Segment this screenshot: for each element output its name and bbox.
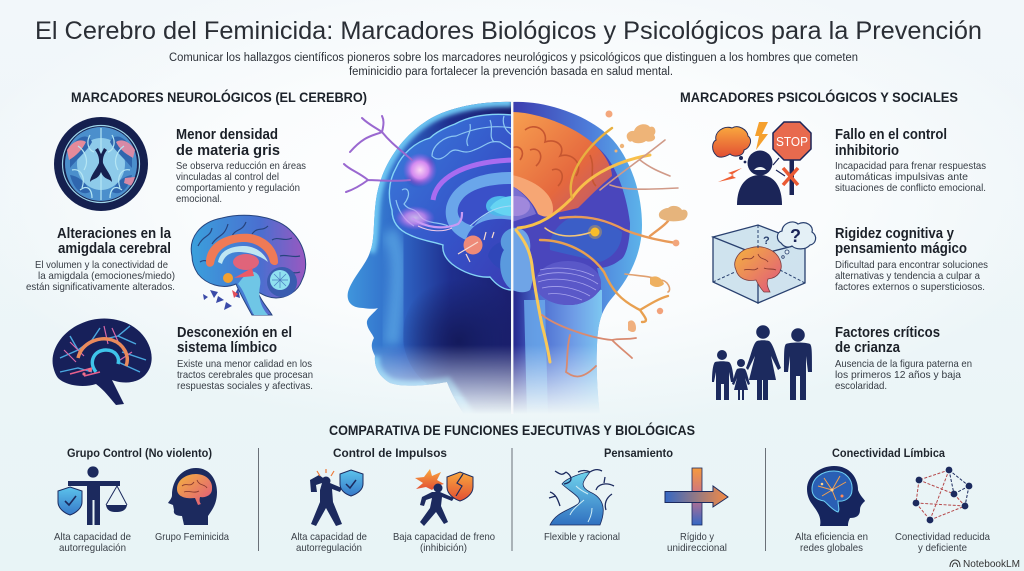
label: autorregulación	[59, 542, 126, 554]
label: Alta capacidad de	[291, 531, 367, 543]
icon: brain in a glass box: ?	[790, 226, 801, 246]
label	[393, 531, 495, 554]
left neurons: purple branches	[344, 116, 412, 192]
text: factores de crianza: Factores críticos	[835, 325, 940, 341]
label: Baja capacidad de freno	[393, 531, 495, 543]
text: amigdala: la amigdala (emociones/miedo)	[38, 270, 175, 282]
label: Alta capacidad de	[54, 531, 131, 543]
text: desconexion: Existe una menor calidad en los	[177, 358, 312, 370]
central illustration: split head	[344, 100, 688, 420]
panel: psychological and social markers	[680, 90, 988, 400]
text: desconexion: sistema límbico	[177, 340, 277, 356]
text: menor densidad: comportamiento y regulación	[176, 182, 300, 194]
title: El Cerebro del Feminicida: Marcadores Biológicos y Psicológicos para la Prevención	[35, 17, 982, 45]
label: Grupo Feminicida	[155, 531, 229, 543]
text: menor densidad: Se observa reducción en áreas	[176, 160, 306, 172]
amber neural tracts	[516, 128, 678, 376]
label	[54, 531, 131, 554]
icon: head with brain	[168, 468, 217, 525]
icon: rigid crossing arrow	[665, 468, 728, 525]
clouds and nodes	[588, 110, 688, 332]
text: amigdala: están significativamente alterados.	[26, 281, 175, 293]
label: Rígido y	[680, 531, 715, 543]
text: menor densidad: emocional.	[176, 193, 222, 205]
column heading: Pensamiento	[604, 446, 673, 460]
label: redes globales	[800, 542, 863, 554]
icon: firm figure with shield	[310, 469, 363, 526]
label: Conectividad reducida	[895, 531, 990, 543]
icon: inhibition failure with stop sign: STOP	[776, 134, 808, 149]
left half: blue head profile	[348, 102, 511, 412]
label	[795, 531, 868, 554]
NotebookLM logo: NotebookLM	[963, 558, 1020, 570]
text: factores de crianza: Ausencia de la figura paterna en	[835, 358, 972, 370]
panel: neurological markers	[26, 90, 367, 405]
text: rigidez cognitiva	[835, 226, 988, 293]
text: rigidez cognitiva: pensamiento mágico	[835, 241, 967, 257]
heading: neurological markers: MARCADORES NEUROLÓGICOS (EL CEREBRO)	[71, 90, 367, 105]
icon: brain in a glass box: ?	[763, 235, 770, 247]
icon: sagittal brain with amygdala	[191, 215, 306, 315]
text: desconexion: Desconexión en el	[177, 325, 292, 341]
icon: limbic system brain	[53, 318, 152, 405]
right half: head and neck	[512, 102, 642, 420]
label: Alta eficiencia en	[795, 531, 868, 543]
text: fallo control inhibitorio: situaciones de conflicto emocional.	[835, 182, 986, 194]
icon: running figure with broken shield	[415, 469, 473, 526]
subtitle	[169, 52, 858, 78]
text: fallo control inhibitorio: automáticas impulsivas ante	[835, 171, 968, 183]
text: amigdala: Alteraciones en la	[57, 226, 172, 242]
text: menor densidad: Menor densidad	[176, 127, 278, 143]
icon: inhibition failure with stop sign	[713, 122, 811, 205]
label	[291, 531, 367, 554]
right half: brain and cortex	[502, 112, 630, 305]
label: unidireccional	[667, 542, 727, 554]
icon: brain MRI scan	[54, 117, 148, 211]
text: amigdala: amigdala cerebral	[58, 241, 171, 257]
icon: balance figure with shield	[58, 466, 127, 525]
text: factores de crianza: los primeros 12 años y baja	[835, 369, 961, 381]
central divider	[511, 100, 513, 414]
label	[895, 531, 990, 554]
text: desconexion	[177, 325, 313, 392]
text: menor densidad: vinculadas al control del	[176, 171, 279, 183]
panel: pensamiento	[544, 446, 728, 554]
text: amigdala: El volumen y la conectividad de	[35, 259, 168, 271]
icon: brain in a glass box	[713, 222, 816, 303]
column heading: Grupo Control (No violento)	[67, 446, 212, 460]
heading: psychological markers: MARCADORES PSICOLÓGICOS Y SOCIALES	[680, 90, 958, 105]
text: fallo control inhibitorio: Incapacidad para frenar respuestas	[835, 160, 986, 172]
text: menor densidad: de materia gris	[176, 143, 280, 159]
text: rigidez cognitiva: alternativas y tendencia a culpar a	[835, 270, 980, 282]
text: desconexion: tractos cerebrales que procesan	[177, 369, 313, 381]
text: amigdala	[26, 226, 175, 293]
text: menor densidad	[176, 127, 306, 205]
panel: control de impulsos	[291, 446, 495, 554]
icon: family silhouettes	[712, 325, 812, 400]
text: rigidez cognitiva: factores externos o supersticiosos.	[835, 281, 985, 293]
text: rigidez cognitiva: Rigidez cognitiva y	[835, 226, 954, 242]
column heading: Control de Impulsos	[333, 446, 447, 460]
text: factores de crianza	[835, 325, 972, 392]
label	[667, 531, 727, 554]
text: factores de crianza: escolaridad.	[835, 380, 887, 392]
label: autorregulación	[296, 542, 362, 554]
text: desconexion: respuestas sociales y afectivas.	[177, 380, 313, 392]
text: fallo control inhibitorio	[835, 127, 986, 194]
subtitle: feminicidio para fortalecer la prevención basada en salud mental.	[349, 66, 673, 78]
text: factores de crianza: de crianza	[835, 340, 901, 356]
section heading: comparison: COMPARATIVA DE FUNCIONES EJECUTIVAS Y BIOLÓGICAS	[329, 423, 695, 438]
label: Flexible y racional	[544, 531, 620, 543]
icon: deficient network	[913, 467, 972, 523]
subtitle: Comunicar los hallazgos científicos pioneros sobre los marcadores neurológicos y psicológicos que distinguen a los hombres que cometen	[169, 52, 858, 64]
panel: conectividad limbica	[795, 446, 990, 554]
label: y deficiente	[918, 542, 967, 554]
label: (inhibición)	[420, 542, 467, 554]
text: fallo control inhibitorio: inhibitorio	[835, 143, 899, 159]
icon: winding river with branches	[549, 470, 614, 525]
panel: grupo control	[54, 446, 229, 554]
column heading: Conectividad Límbica	[832, 446, 945, 460]
text: rigidez cognitiva: Dificultad para encontrar soluciones	[835, 259, 988, 271]
icon: head with glowing network	[807, 466, 865, 526]
text: fallo control inhibitorio: Fallo en el control	[835, 127, 947, 143]
